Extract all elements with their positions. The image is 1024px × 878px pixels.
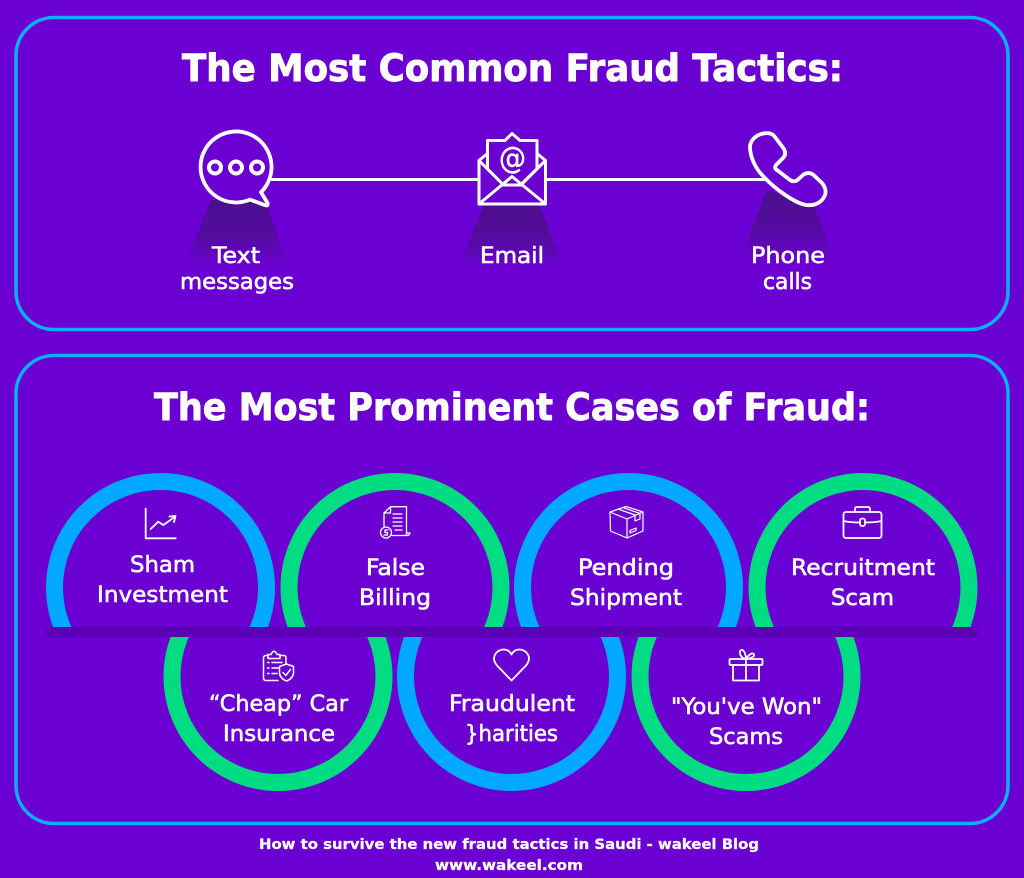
ring: pending shipment: Pending [578,556,674,581]
label: phone calls: calls [763,270,812,295]
label: text messages: messages [180,270,294,295]
connector line [270,178,765,181]
label: text messages [180,244,294,295]
icon: briefcase [844,507,882,538]
icon: line chart [146,508,176,538]
icon: phone handset [750,133,826,205]
panel: prominent cases of fraud [16,356,1008,824]
ring: recruitment scam: Recruitment [791,556,935,581]
ring: pending shipment [514,473,743,627]
panel: common fraud tactics [16,18,1008,330]
ring: cheap car insurance: Insurance [223,722,335,747]
footer credit: How to survive the new fraud tactics in Saudi - wakeel Blog [259,837,759,853]
ring: recruitment scam [748,473,978,627]
ring: false billing [280,473,510,627]
footer credit: www.wakeel.com [435,858,583,874]
title: tactics: The Most Common Fraud Tactics: [182,47,843,90]
ring: false billing: False [366,556,425,581]
title: cases: The Most Prominent Cases of Fraud: [154,386,870,429]
divider band [46,627,978,637]
label: phone calls: Phone [751,244,825,269]
ring: fraudulent charities: Fraudulent [449,692,575,717]
label: text messages: Text [211,244,260,269]
icon: clipboard with shield [264,651,294,681]
shadow: text messages [185,200,287,265]
ring: sham investment: Sham [130,553,195,578]
shadow: phone [740,190,834,259]
ring: you've won scams: Scams [709,725,783,750]
ring: fraudulent charities: }harities [465,722,558,747]
ring: you've won scams [632,637,860,791]
icon: gift box [730,650,762,680]
ring: you've won scams: "You've Won" [671,695,822,720]
ring: sham investment: Investment [97,583,228,608]
ring: pending shipment: Shipment [570,586,682,611]
ring: fraudulent charities [397,637,626,791]
icon: package box [610,506,643,538]
icon: invoice [380,507,410,538]
label: email: Email [480,244,544,269]
icon: heart [494,650,529,680]
footer credit [259,837,759,874]
label: phone calls [751,244,825,295]
icon: email envelope [479,134,546,204]
ring: recruitment scam: Scam [831,586,894,611]
ring: cheap car insurance [164,637,392,791]
ring: cheap car insurance: “Cheap” Car [209,692,349,717]
ring: false billing: Billing [359,586,431,611]
ring: sham investment [46,473,275,627]
icon: speech bubble [201,131,272,205]
icon: email envelope: @ [499,141,526,176]
shadow: email [459,205,564,267]
